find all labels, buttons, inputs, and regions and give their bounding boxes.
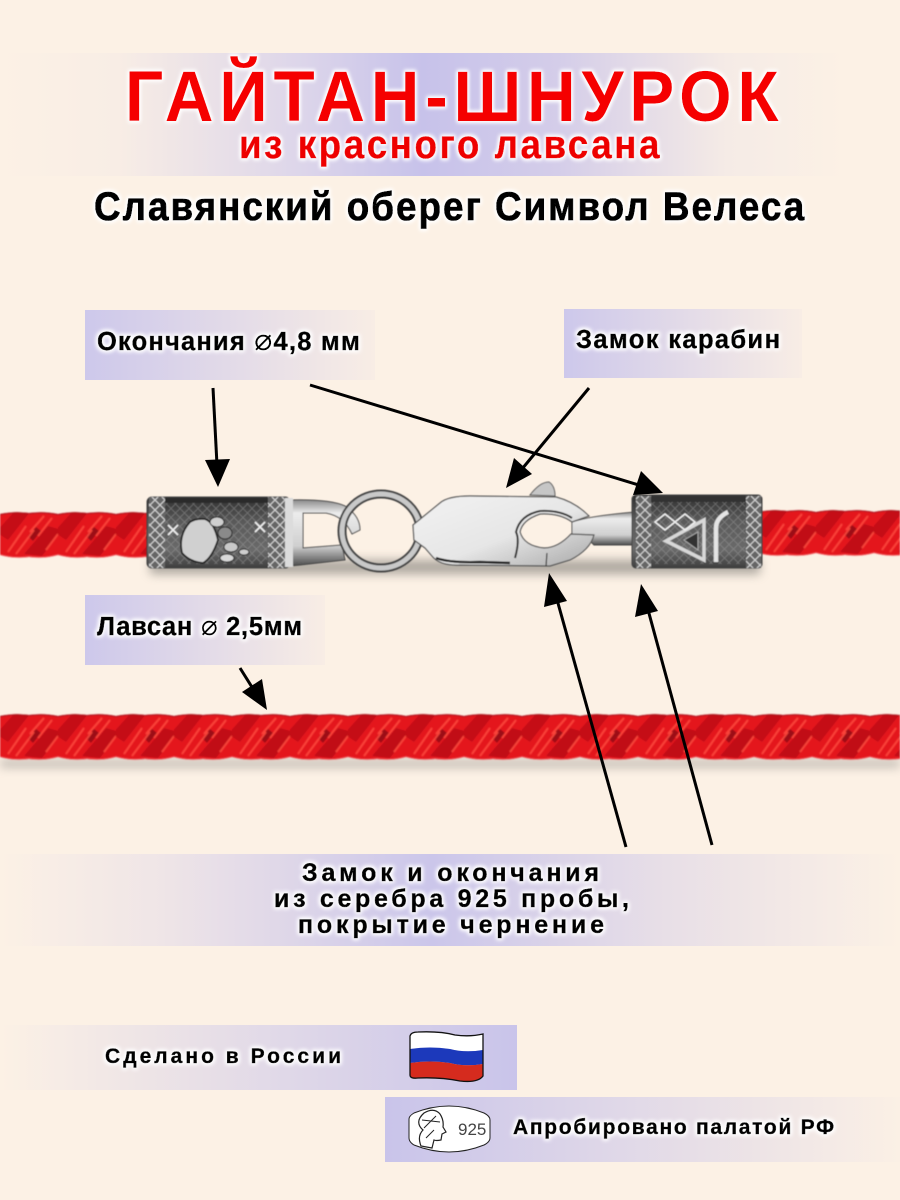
heading: amulet name: Славянский оберег Символ Велеса [94,185,805,229]
panel: label end caps [85,310,375,380]
lower cord [0,712,900,767]
panel: label cord [85,595,325,665]
arrow: end cap from bottom note [635,584,712,845]
panel: made in Russia [0,1025,517,1090]
left cord piece [0,510,152,560]
panel: silver note: покрытие чернение [298,911,604,939]
Veles symbol [666,520,704,560]
panel: assay office: Апробировано палатой РФ [513,1116,834,1139]
left end cap [147,497,293,568]
icon: Russian flag [410,1032,483,1081]
arrow: to clasp [506,388,589,488]
lobster clasp [413,482,594,566]
cord shadow [0,760,900,767]
panel: silver note: Замок и окончания [302,859,599,887]
panel: label cord: Лавсан ⌀ 2,5мм [97,609,303,642]
left stem [290,500,360,566]
panel: label end caps: Окончания ⌀4,8 мм [97,323,361,358]
arrow: to right end cap [310,385,663,495]
panel: made in Russia: Сделано в России [105,1045,341,1068]
panel: label clasp: Замок карабин [576,326,780,354]
icon: 925 hallmark [409,1106,490,1152]
subtitle: из красного лавсана [239,123,660,167]
panel: silver note [0,854,900,946]
title: ГАЙТАН-ШНУРОК [125,56,779,136]
right end cap [632,495,762,568]
panel: assay office [385,1097,900,1162]
shadow under clasp [150,560,760,574]
jump ring [342,494,420,568]
right cord piece [758,508,900,558]
panel: title banner [0,53,845,176]
right stem [572,512,635,545]
arrow: clasp from bottom note [544,573,626,847]
arrow: to left end cap [205,388,230,487]
arrow: cord [240,668,267,710]
icon: 925 hallmark: 925 [458,1120,486,1139]
panel: label clasp [564,309,802,378]
paw print [181,519,218,563]
cord with clasp [0,482,900,574]
panel: silver note: из серебра 925 пробы, [274,885,629,913]
